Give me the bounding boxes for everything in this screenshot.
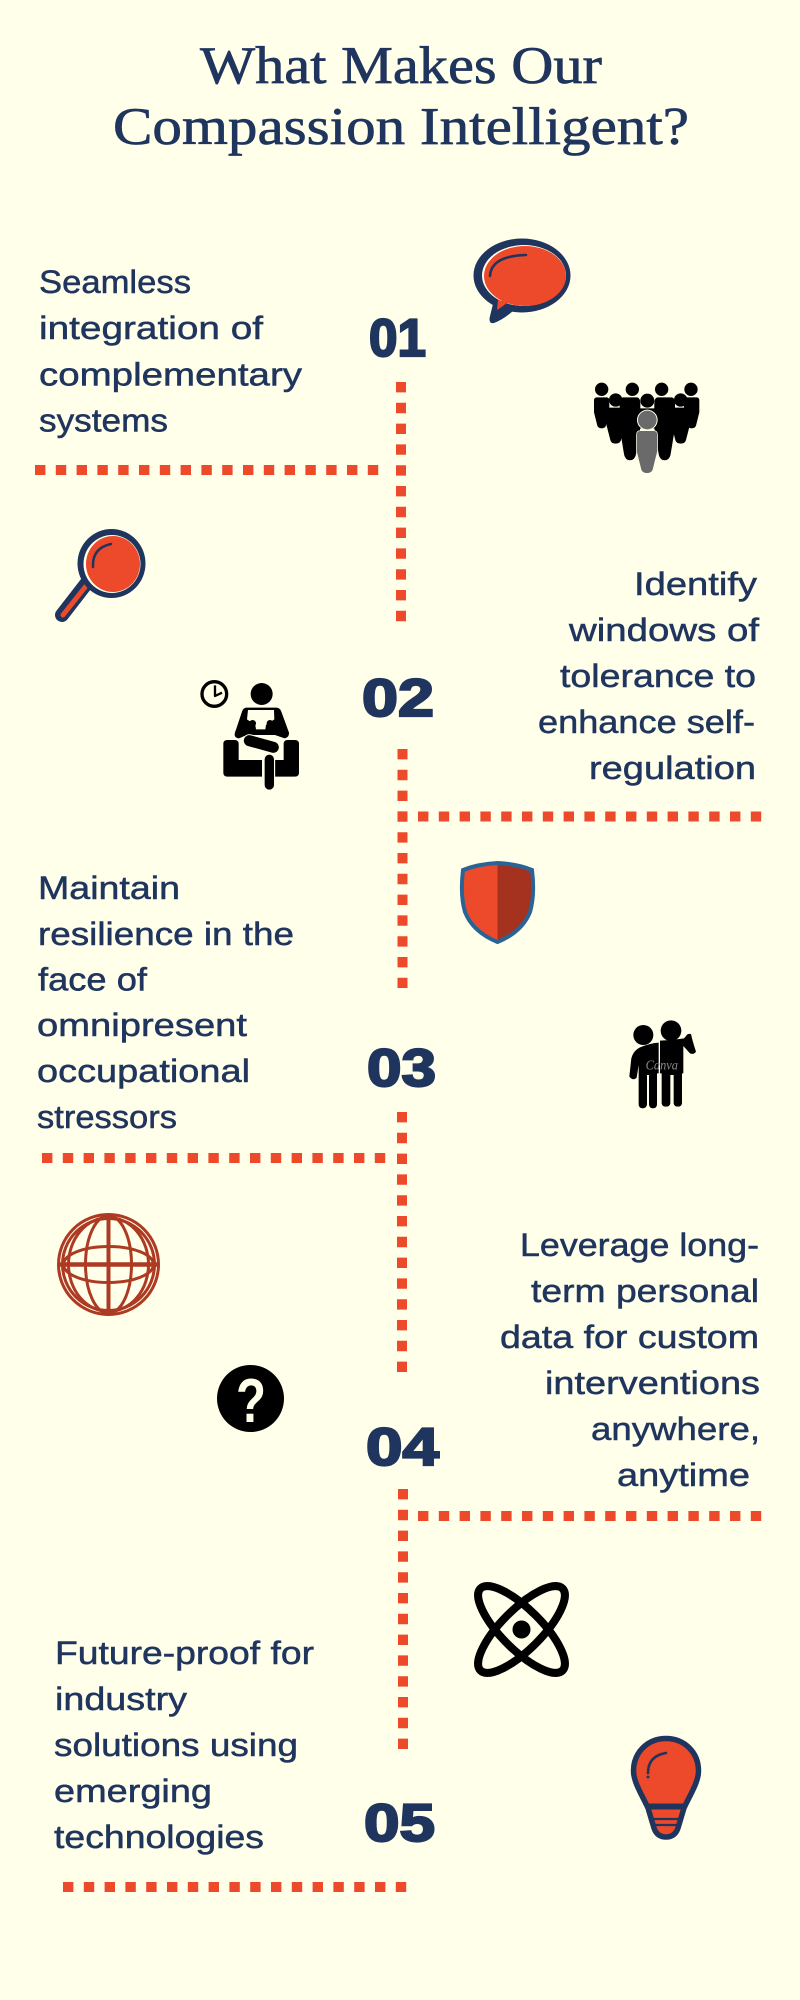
watermark: Canva (646, 1058, 678, 1073)
step 02 text: Identify (634, 566, 757, 602)
step 04 horizontal dotted line (418, 1511, 762, 1521)
step 04 text: anytime (617, 1457, 750, 1493)
step 04 number: 04 (366, 1418, 440, 1477)
title (113, 37, 689, 156)
step 05 text: solutions using (54, 1727, 298, 1763)
panel: step 05 (54, 1574, 698, 1887)
step 05 text: industry (55, 1681, 187, 1717)
panel: step 04 (58, 1214, 762, 1750)
step 04 text: anywhere, (591, 1411, 760, 1447)
step 04 text: data for custom (500, 1319, 759, 1355)
icon: light bulb (634, 1738, 698, 1837)
step 05 number: 05 (364, 1794, 435, 1853)
step 01 text: Seamless (39, 264, 191, 300)
step 01 number: 01 (369, 309, 426, 368)
step 03 text: resilience in the (38, 916, 294, 952)
icon: person waiting in armchair with clock (202, 682, 299, 785)
step 02 horizontal dotted line (418, 812, 762, 822)
step 02 text (538, 566, 759, 786)
icon: globe (58, 1214, 158, 1314)
step 03 text: face of (38, 962, 147, 998)
step 05 text (54, 1635, 314, 1855)
icon: group of people (594, 383, 699, 473)
step 04 vertical dotted line (398, 1489, 408, 1750)
step 03 text: occupational (37, 1053, 250, 1089)
step 04 text: interventions (545, 1365, 760, 1401)
step 04 text (500, 1227, 760, 1493)
step 01 vertical dotted line (396, 382, 406, 622)
step 02 text: tolerance to (560, 658, 756, 694)
step 03 number: 03 (367, 1039, 436, 1098)
step 04 text: term personal (531, 1273, 759, 1309)
step 03 text (37, 870, 294, 1135)
step 05 text: emerging (54, 1773, 212, 1809)
step 01 text: systems (39, 402, 168, 438)
step 05 text: Future-proof for (55, 1635, 314, 1671)
icon: speech bubble (474, 238, 570, 323)
step 02 text: regulation (589, 750, 756, 786)
icon: magnifying glass (62, 529, 146, 615)
icon: atom (466, 1574, 577, 1685)
step 04 text: Leverage long- (520, 1227, 759, 1263)
step 05 horizontal dotted line (63, 1882, 407, 1892)
step 03 horizontal dotted line (42, 1153, 386, 1163)
step 01 text: integration of (39, 310, 263, 346)
icon: two friends (629, 1020, 696, 1108)
step 03 vertical dotted line (397, 1112, 407, 1372)
icon: question mark: ? (236, 1367, 266, 1436)
step 02 number: 02 (362, 669, 434, 728)
step 01 text (39, 264, 302, 438)
step 03 text: Maintain (38, 870, 180, 906)
title: Compassion Intelligent? (113, 98, 689, 156)
icon: shield (462, 863, 533, 942)
panel: step 01 (35, 238, 699, 622)
step 02 vertical dotted line (398, 749, 408, 988)
step 05 text: technologies (54, 1819, 264, 1855)
icon: question mark (217, 1365, 284, 1436)
title: What Makes Our (200, 37, 602, 95)
step 01 horizontal dotted line (35, 465, 379, 475)
step 02 text: windows of (568, 612, 759, 648)
panel: step 02 (62, 529, 762, 988)
step 01 text: complementary (39, 356, 302, 392)
step 02 text: enhance self- (538, 704, 755, 740)
panel: step 03 (37, 863, 696, 1372)
step 03 text: stressors (37, 1099, 177, 1135)
step 03 text: omnipresent (37, 1007, 247, 1043)
